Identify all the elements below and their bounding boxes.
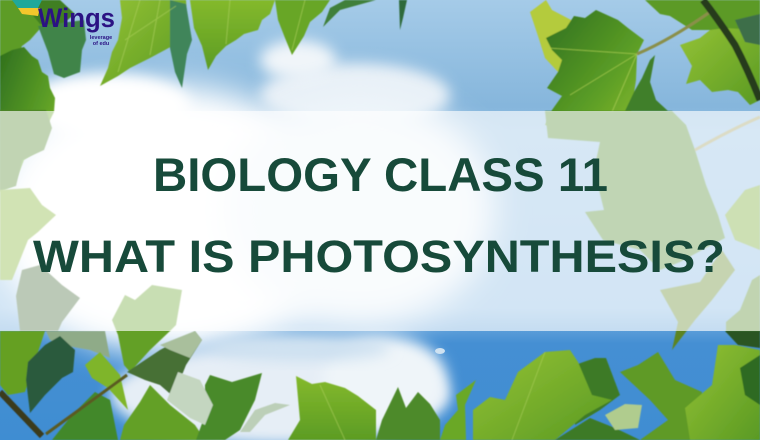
heading line 1: BIOLOGY CLASS 11	[153, 148, 608, 201]
branch	[0, 392, 42, 436]
foliage: bottom left	[0, 285, 290, 440]
leaf: silver and dark	[127, 331, 202, 398]
foliage: top left	[0, 0, 407, 192]
leaf: teal lobe	[170, 0, 192, 88]
leaf: lower right	[660, 250, 735, 350]
branch stem	[695, 117, 760, 150]
leaf: top middle	[190, 0, 275, 70]
leaf: upper left grey	[0, 110, 52, 190]
leaf: teal shadow leaf	[38, 20, 86, 78]
foliage: left under band	[0, 110, 80, 331]
logo mark: yellow	[18, 8, 40, 16]
logo tagline: leverage	[90, 35, 112, 41]
leaf: dark back	[575, 358, 620, 425]
leaf: dark green back	[20, 0, 75, 26]
leaf: small dark	[625, 55, 668, 111]
leaf: silver tip	[240, 403, 290, 432]
leaf: thin hanging	[399, 0, 407, 30]
leaf: dark lower	[555, 418, 640, 440]
leaf: big right under band	[545, 111, 725, 270]
leaf: far left	[0, 0, 46, 62]
branch stem	[46, 375, 127, 434]
leaf: left under band	[0, 188, 56, 280]
leaf: large bottom	[473, 350, 612, 440]
leaf: upright top	[112, 285, 182, 372]
leaf: big centre-left	[100, 0, 188, 86]
foliage: beneath band right	[545, 111, 760, 350]
leaf: edge lower	[726, 275, 760, 332]
leaf: lower big left	[52, 392, 118, 440]
leaf: upright small	[440, 380, 476, 440]
translucent white band	[0, 111, 760, 331]
veins	[320, 352, 545, 440]
leaf: yellow behind	[530, 0, 590, 72]
logo mark: teal	[12, 0, 42, 8]
veins	[548, 48, 637, 112]
foliage: bottom centre and right	[288, 331, 760, 440]
leaf: right cluster	[680, 28, 760, 105]
logo: Wings	[12, 0, 115, 47]
leaf: lower left	[0, 47, 55, 192]
leaf: dark corner	[725, 331, 760, 348]
leaf: dark grey	[16, 265, 80, 331]
leaf: silver top	[46, 331, 110, 358]
dark branch	[703, 0, 760, 100]
logo tagline second line: of edu	[93, 41, 109, 47]
leaf: centre bottom	[288, 376, 376, 440]
heading: title	[33, 148, 725, 282]
veins	[118, 0, 305, 72]
leaf: right edge	[725, 185, 760, 250]
leaf: main top right	[545, 10, 644, 135]
leaf: bottom big	[120, 385, 205, 440]
branch stem	[637, 12, 710, 54]
leaf: pale patch	[167, 372, 213, 425]
leaf: dark hanging	[26, 336, 75, 413]
leaf: far right big	[685, 345, 760, 440]
leaf: dark right	[740, 355, 760, 405]
leaf: top right of group	[275, 0, 330, 55]
leaf: right of bottom	[620, 352, 702, 440]
dark patch	[735, 14, 760, 45]
logo wordmark: Wings	[38, 3, 115, 33]
leaf: spiky small	[376, 387, 440, 440]
leaf: centre dark	[196, 373, 262, 440]
leaf: small mid	[85, 352, 128, 410]
clouds	[0, 40, 495, 440]
heading line 2: WHAT IS PHOTOSYNTHESIS?	[33, 231, 725, 282]
leaf: green base left	[0, 331, 45, 395]
leaf: pale spot	[605, 404, 642, 430]
leaf: top cluster	[645, 0, 760, 34]
leaf: narrow	[323, 0, 376, 27]
foliage: top right	[530, 0, 760, 135]
pale patch	[160, 331, 202, 358]
